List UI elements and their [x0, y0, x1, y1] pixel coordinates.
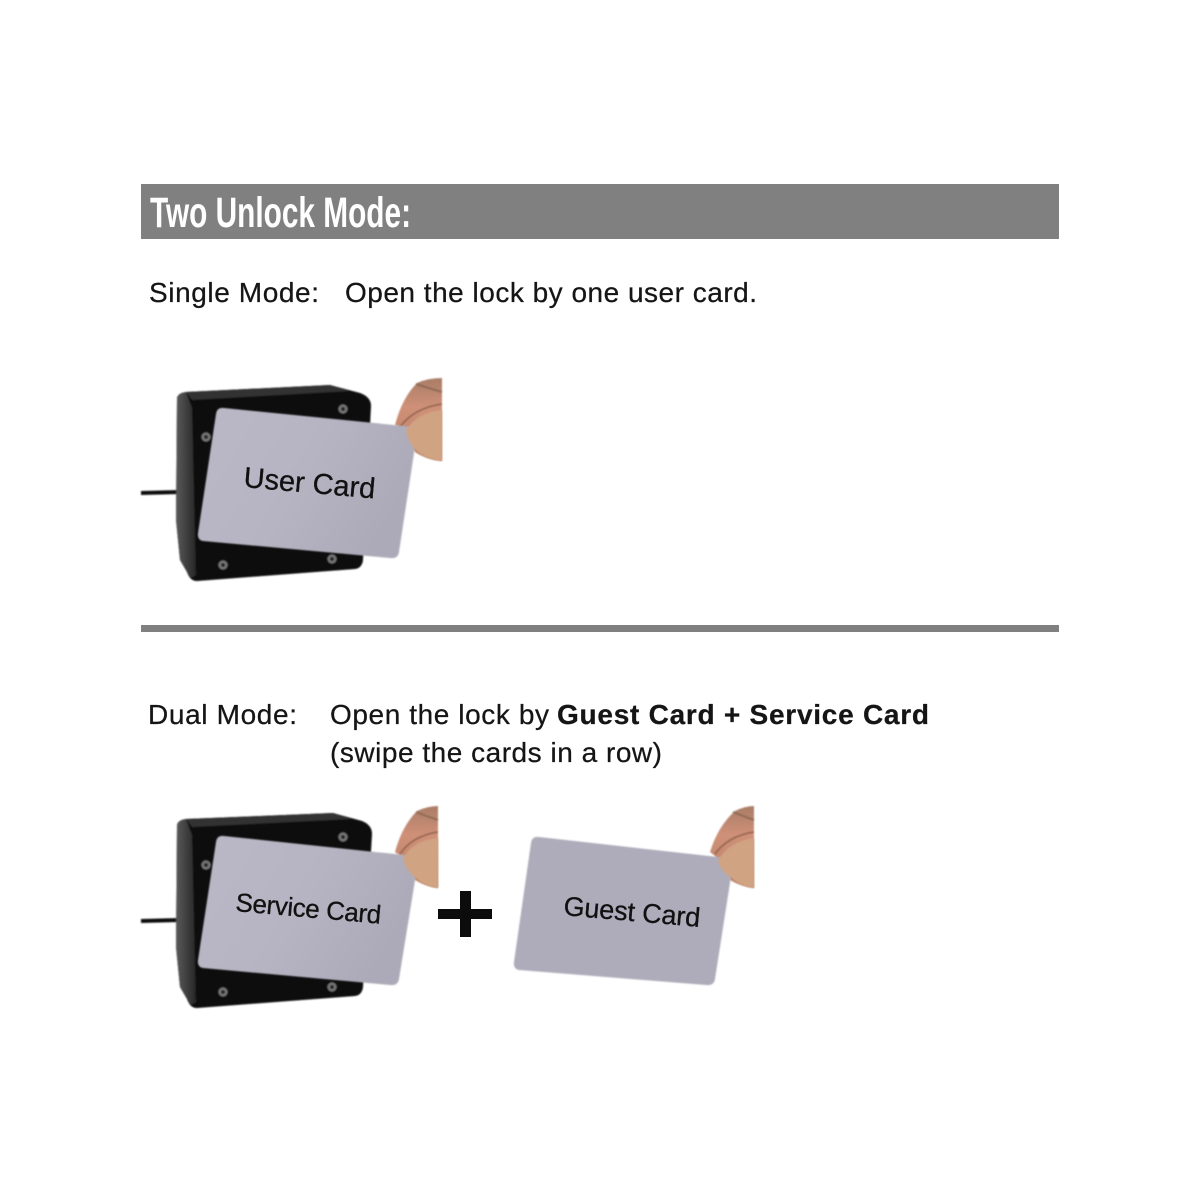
card label: Service Card: Service Card [234, 887, 383, 930]
single mode description: Single Mode: [149, 277, 319, 308]
icon: plus sign [438, 891, 492, 937]
illustration: service card on lock [141, 806, 438, 1008]
icon: thumb [403, 838, 438, 888]
card label: Guest Card: Guest Card [562, 891, 702, 933]
icon: fingers [710, 806, 754, 888]
single mode description [149, 277, 757, 308]
user card [198, 408, 416, 558]
icon: thumb [406, 410, 442, 461]
icon: fingers [395, 806, 438, 888]
header bar [141, 184, 1059, 239]
service card [198, 836, 417, 985]
illustration: user card on lock [141, 378, 442, 581]
illustration: guest card [514, 806, 754, 985]
card label: User Card: User Card [242, 462, 377, 505]
icon: thumb [718, 838, 754, 888]
icon: fingers [395, 378, 442, 461]
icon: lock box [141, 385, 371, 581]
heading: Two Unlock Mode: Two Unlock Mode: [150, 189, 411, 237]
guest card [514, 837, 732, 985]
dual mode description: Open the lock by [330, 699, 549, 730]
icon: lock box [141, 813, 372, 1008]
single mode description: Open the lock by one user card. [345, 277, 757, 308]
dual mode description: (swipe the cards in a row) [330, 737, 662, 768]
dual mode description: Guest Card + Service Card [557, 699, 929, 730]
dual mode description [148, 699, 929, 768]
dual mode description: Dual Mode: [148, 699, 297, 730]
divider [141, 625, 1059, 632]
